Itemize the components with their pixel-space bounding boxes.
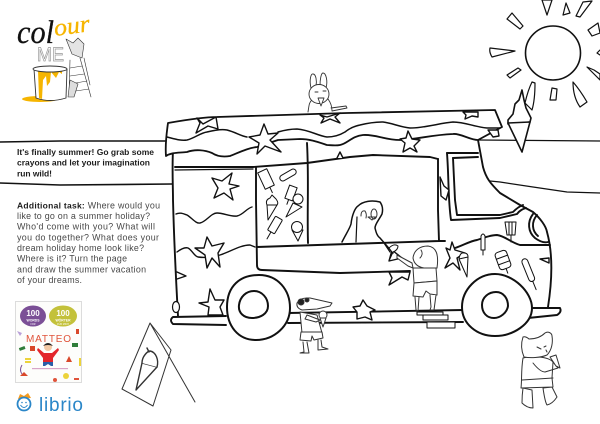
paint puddle [22, 96, 58, 102]
star decorations [177, 112, 549, 320]
green speech bubble: WÖRTER [55, 318, 71, 322]
van body outline [171, 140, 561, 325]
rear wheel [227, 275, 290, 340]
sun rays [490, 0, 600, 107]
librio wordmark: librio [39, 395, 83, 416]
logo word colour: col [17, 15, 54, 51]
additional task text: of your dreams. [17, 275, 82, 285]
additional task text: Where is it? Turn the page [17, 254, 127, 264]
purple speech bubble: FOR [30, 323, 36, 326]
bear [521, 332, 560, 408]
intro text: It's finally summer! Go grab some [17, 147, 154, 157]
green speech bubble: 100 [56, 309, 70, 318]
intro text [17, 147, 154, 178]
additional task text: you do together? What does your [17, 232, 159, 242]
additional task text: Who'd come with you? What will [17, 222, 155, 232]
additional task text: Additional task: Where would you [17, 200, 160, 210]
sun [490, 0, 600, 107]
logo word me: ME [37, 45, 64, 66]
green speech bubble [49, 306, 77, 326]
oval lamp [172, 302, 180, 312]
window ice creams [258, 168, 303, 241]
confetti [17, 329, 81, 382]
side wave decorations [176, 207, 255, 257]
librio logo [18, 393, 83, 416]
book character [37, 343, 59, 366]
paint can [33, 66, 67, 100]
side popsicles [459, 222, 539, 291]
librio smiley icon [18, 393, 31, 410]
intro text: run wild! [17, 168, 52, 178]
purple speech bubble: 100 [26, 309, 40, 318]
horizon lines [0, 140, 600, 193]
additional task text: dream holiday home look like? [17, 243, 144, 253]
book cover [15, 301, 82, 383]
flag ice cream icon [136, 348, 158, 390]
additional task text [17, 200, 160, 285]
front wheel [462, 274, 532, 336]
intro text: crayons and let your imagination [17, 158, 150, 168]
ice cream cone [508, 82, 535, 152]
flag with ice cream drawing [122, 323, 195, 406]
additional task text: like to go on a summer holiday? [17, 211, 150, 221]
purple speech bubble [20, 306, 46, 326]
awning [166, 110, 502, 157]
green speech bubble: FÜR MICH [57, 323, 69, 326]
crocodile [297, 298, 332, 353]
penguin [342, 201, 398, 261]
rabbit on the roof [308, 73, 347, 112]
child on steps [397, 246, 455, 328]
logo: colour me [17, 11, 92, 102]
logo word colour [17, 11, 92, 51]
ice cream van [166, 110, 561, 340]
logo word colour: our [52, 11, 92, 42]
child figure [397, 246, 438, 311]
sun disc [526, 26, 580, 80]
book title: MATTEO [26, 334, 71, 345]
ladder and painter [66, 38, 91, 97]
purple speech bubble: WORDS [26, 318, 40, 322]
steps [417, 312, 455, 328]
additional task text: and draw the summer vacation [17, 264, 146, 274]
